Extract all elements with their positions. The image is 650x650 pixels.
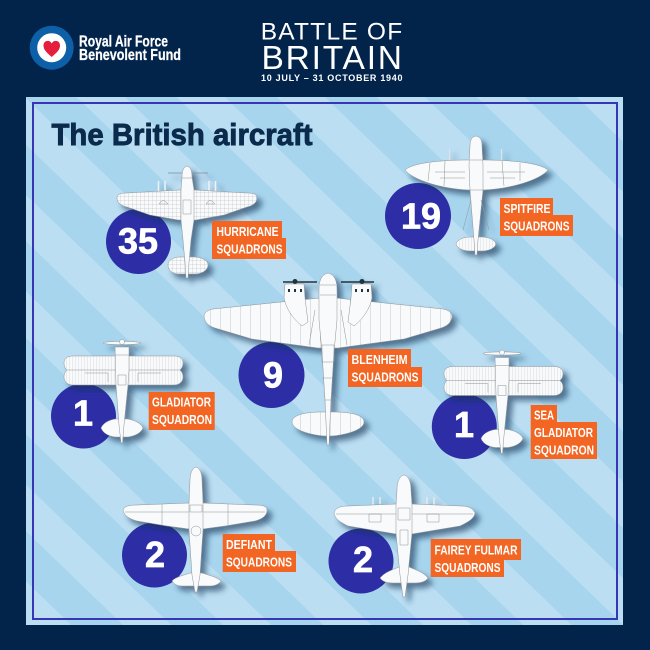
label: Spitfire squadrons (500, 198, 573, 236)
count: Sea Gladiator 1 (432, 394, 497, 459)
label: Spitfire squadrons: SQUADRONS (504, 218, 570, 234)
label: Blenheim squadrons: BLENHEIM (352, 352, 408, 367)
count: Sea Gladiator 1: 1 (454, 404, 474, 445)
label: Gladiator squadron: SQUADRON (152, 412, 212, 427)
count: Defiant 2: 2 (145, 534, 165, 575)
label: Blenheim squadrons (348, 349, 422, 387)
count: Spitfire 19: 19 (401, 196, 441, 236)
label: Hurricane squadrons: HURRICANE (216, 224, 279, 239)
count: Fairey Fulmar 2: 2 (353, 539, 373, 580)
title: The British aircraft (52, 117, 312, 152)
label: Gladiator squadron (149, 392, 215, 430)
aircraft: Gladiator (64, 340, 183, 443)
logo: Battle of Britain: BATTLE OF (261, 18, 402, 45)
panel: striped background with inner border (26, 97, 623, 625)
label: Defiant squadrons (223, 534, 296, 572)
label: Gladiator squadron: GLADIATOR (152, 394, 211, 410)
count: Gladiator 1 (51, 384, 116, 448)
count: Defiant 2 (122, 522, 187, 588)
logo: RAF Benevolent Fund: Benevolent Fund (79, 47, 181, 64)
aircraft: Hurricane (117, 166, 257, 278)
aircraft: Blenheim (204, 273, 452, 445)
aircraft: Sea Gladiator (444, 350, 563, 454)
label: Sea Gladiator squadron (531, 405, 597, 459)
count: Fairey Fulmar 2 (328, 528, 394, 594)
logo: Battle of Britain: BRITAIN (262, 40, 402, 77)
count: Blenheim 9: 9 (263, 354, 283, 396)
label: Fairey Fulmar squadrons: SQUADRONS (434, 560, 501, 575)
label: Sea Gladiator squadron: GLADIATOR (534, 425, 593, 440)
label: Fairey Fulmar squadrons: FAIREY FULMAR (434, 542, 518, 558)
label: Defiant squadrons: DEFIANT (226, 537, 272, 552)
label: Sea Gladiator squadron: SEA (534, 408, 554, 422)
logo: RAF Benevolent Fund: Royal Air Force (79, 34, 168, 50)
label: Fairey Fulmar squadrons (431, 539, 521, 577)
count: Gladiator 1: 1 (73, 392, 93, 434)
aircraft: Defiant (123, 467, 267, 592)
logo: Battle of Britain (261, 18, 402, 83)
label: Hurricane squadrons (212, 221, 286, 259)
label: Blenheim squadrons: SQUADRONS (352, 370, 419, 384)
label: Defiant squadrons: SQUADRONS (226, 554, 292, 570)
label: Hurricane squadrons: SQUADRONS (216, 242, 283, 256)
label: Sea Gladiator squadron: SQUADRON (534, 442, 594, 458)
aircraft: Fairey Fulmar (334, 475, 475, 597)
count: Spitfire 19 (385, 183, 451, 249)
logo: Battle of Britain: 10 JULY – 31 OCTOBER 1940 (261, 73, 402, 83)
count: Hurricane 35: 35 (118, 220, 158, 262)
count: Blenheim 9 (238, 342, 304, 408)
logo: RAF Benevolent Fund (30, 26, 181, 70)
aircraft: Spitfire (405, 136, 548, 255)
count: Hurricane 35 (106, 209, 171, 274)
label: Spitfire squadrons: SPITFIRE (504, 201, 551, 216)
